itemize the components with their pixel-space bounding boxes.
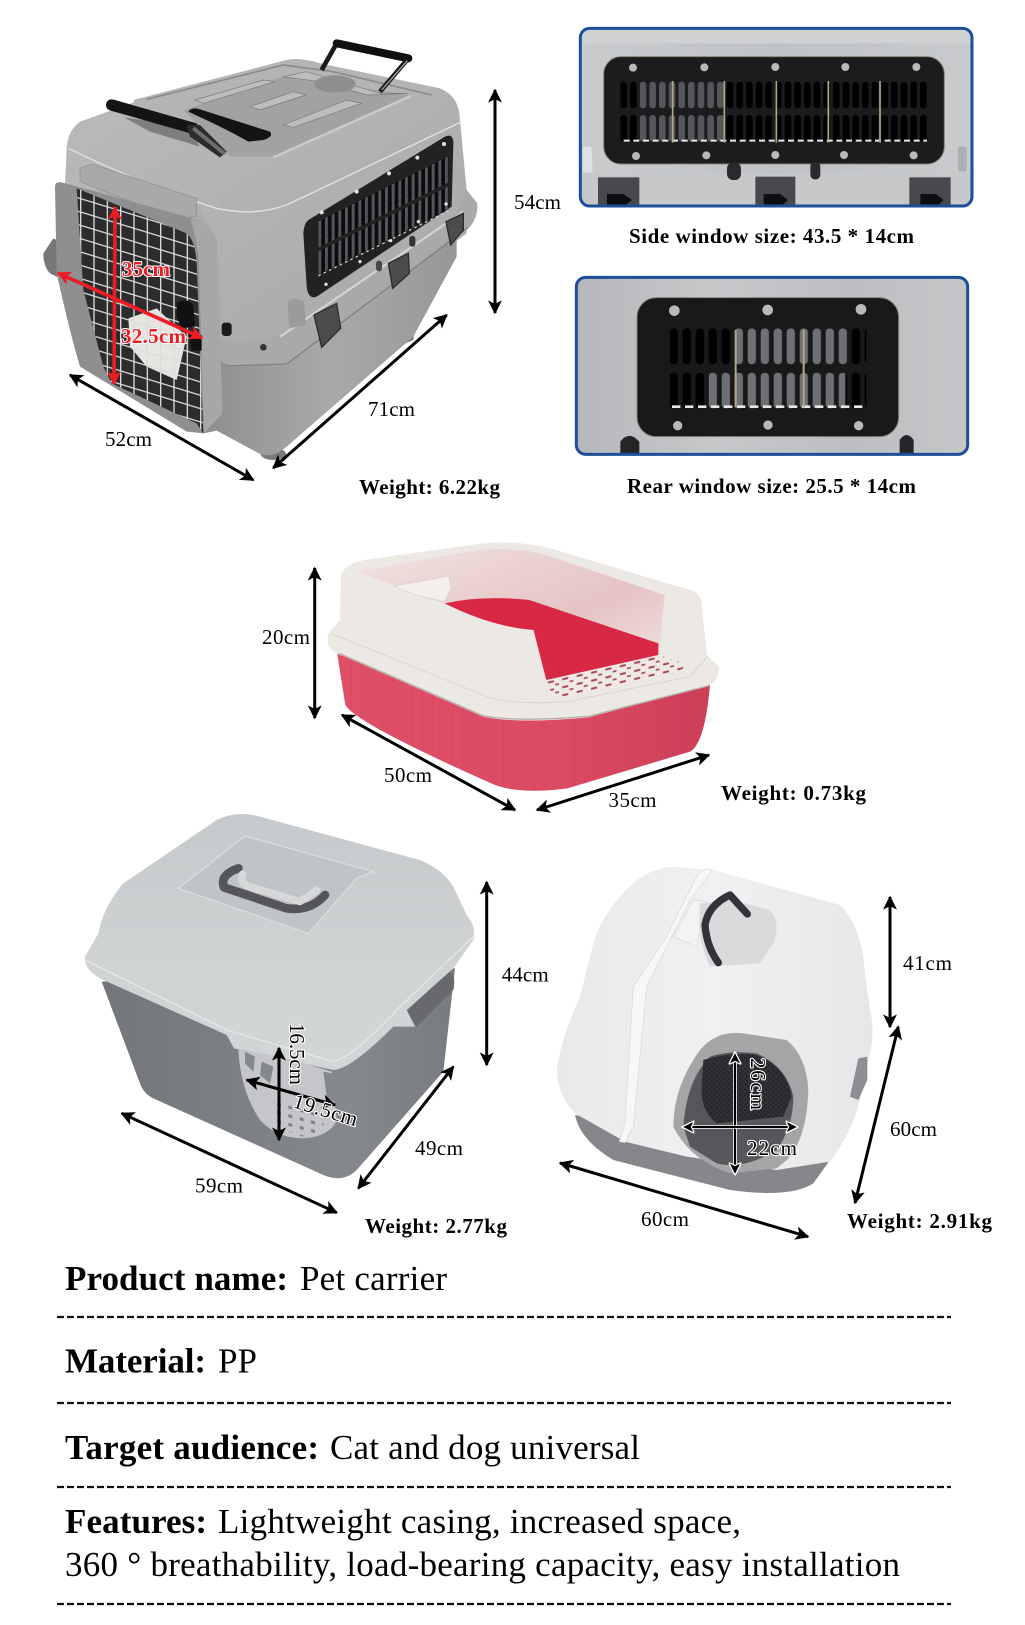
handle [705, 895, 747, 963]
band lower edge [227, 227, 468, 366]
label: depth: 49cm [415, 1136, 463, 1160]
arrow: opening width [247, 1080, 335, 1105]
red floor [445, 598, 658, 680]
panel: rear window [576, 277, 968, 498]
grey carrier illustration [85, 814, 474, 1178]
label: door height: 26cm [746, 1058, 770, 1110]
label: hooded carrier weight: Weight: 2.91kg [847, 1209, 992, 1233]
hood seam strip [619, 869, 713, 1143]
side band [207, 190, 477, 367]
hooded carrier illustration [557, 867, 872, 1193]
vent slots [620, 82, 929, 142]
label: carrier weight: Weight: 6.22kg [359, 475, 500, 499]
door right frame light [190, 218, 223, 433]
wheels [261, 328, 415, 460]
door latch [177, 300, 202, 351]
screws [629, 63, 920, 160]
screws [669, 304, 866, 430]
spec: features: Features: [65, 1502, 207, 1541]
label: grey carrier weight: Weight: 2.77kg [365, 1214, 508, 1238]
bowl behind mesh [128, 308, 187, 380]
blue border [580, 28, 972, 206]
knobs [620, 435, 914, 453]
spec: features: Lightweight casing, increased space, [218, 1502, 741, 1541]
door frame [55, 182, 223, 433]
spec: target audience [65, 1428, 640, 1467]
interior dark litter grid [702, 1054, 792, 1123]
rim line on shell [68, 122, 462, 212]
wire bars [736, 330, 804, 407]
side window photo [580, 28, 972, 207]
spec: features: 360 ° breathability, load-bearing capacity, easy installation [65, 1545, 900, 1584]
label: width: 52cm [105, 427, 152, 451]
spec: material: Material: [65, 1342, 206, 1380]
litter tray illustration [328, 542, 719, 791]
front handle [112, 105, 227, 157]
arrow: hood width [560, 1163, 808, 1237]
arrow: door width core [683, 1126, 797, 1128]
top panel [178, 836, 373, 933]
door surround [673, 1033, 808, 1173]
arrow: hood depth [855, 1027, 898, 1203]
rear window photo [576, 277, 968, 454]
carrier illustration [43, 43, 477, 460]
lid rim line [85, 937, 473, 1062]
blue border [576, 277, 968, 454]
label: height: 44cm [502, 963, 549, 987]
label: height: 54cm [514, 190, 561, 214]
lid highlight [273, 96, 411, 157]
lid plate [183, 77, 410, 157]
hood [557, 867, 872, 1170]
rim upper edge [331, 633, 707, 703]
arrow: tray height [313, 568, 316, 718]
lid [85, 814, 474, 1070]
opening perforations [273, 1100, 327, 1137]
wire bars [673, 81, 880, 143]
pink base [337, 652, 710, 791]
spec: material: PP [218, 1342, 257, 1380]
arrow: tray length [342, 715, 515, 810]
arrow: door width [58, 273, 202, 338]
arrow: carrier length [273, 315, 447, 468]
label: height: 41cm [903, 951, 952, 975]
spec: features [65, 1502, 900, 1584]
lower body [203, 233, 457, 455]
arrow: tray width [537, 755, 709, 810]
vent slots [670, 328, 866, 408]
arrow: opening height [278, 1048, 280, 1140]
label: depth: 60cm [890, 1117, 937, 1141]
product: litter tray with dimensions [262, 542, 866, 812]
arrow: carrier width [122, 1113, 337, 1213]
arrow: carrier depth [358, 1067, 453, 1188]
silhouette fill [65, 180, 467, 370]
opening side mesh [245, 1052, 336, 1103]
label: width: 59cm [195, 1174, 243, 1198]
front handle recess [188, 108, 271, 142]
band highlight [280, 212, 463, 337]
hinge tab [673, 900, 707, 947]
spec: target audience: Cat and dog universal [330, 1428, 640, 1467]
door mesh [77, 188, 203, 433]
litter scoop [394, 576, 451, 602]
lower rail [580, 173, 972, 207]
grey base [102, 968, 455, 1178]
side opening [238, 1048, 337, 1138]
caption: rear window size: Rear window size: 25.5 * 14cm [627, 474, 916, 498]
black plate [637, 298, 899, 437]
handle recess [699, 900, 777, 967]
rim lower shadow [339, 653, 709, 719]
label: door width: 32.5cm [121, 324, 186, 348]
handle [223, 868, 325, 909]
spec: target audience: Target audience: [65, 1428, 319, 1467]
side vent plate [303, 136, 453, 297]
caption: side window size: Side window size: 43.5 * 14cm [629, 224, 914, 248]
spec: product name: Product name: [65, 1259, 288, 1298]
arrow: door width [683, 1125, 797, 1129]
arrow: door height [114, 207, 115, 384]
label: tray width: 35cm [608, 788, 656, 812]
side handle [407, 972, 454, 1027]
lid ridge [147, 65, 432, 99]
white tray shell and rim [328, 542, 719, 721]
door interior [683, 1052, 793, 1165]
post and pegs [222, 236, 415, 351]
label: tray length: 50cm [384, 763, 432, 787]
arrow: carrier width [70, 375, 253, 480]
label: tray height: 20cm [262, 625, 310, 649]
latch clips [314, 213, 463, 347]
arrow: carrier height [494, 90, 496, 313]
lid cup recess [314, 75, 356, 93]
label: opening width: 19.5cm [291, 1089, 361, 1131]
arrow: door height core [734, 1053, 736, 1174]
side handle tab [850, 1057, 867, 1100]
label: length: 71cm [368, 397, 415, 421]
arrow: door height [733, 1053, 737, 1174]
label: door width: 22cm [747, 1136, 797, 1160]
label: tray weight: Weight: 0.73kg [721, 781, 866, 805]
door hood moulding [80, 164, 197, 218]
black plate [604, 57, 944, 164]
knobs [727, 162, 820, 180]
product: airline pet carrier with dimensions [43, 43, 561, 499]
lid vent recesses [195, 72, 408, 127]
door interior [77, 188, 203, 433]
label: opening height: 16.5cm [285, 1023, 309, 1085]
product: white hooded carrier with dimensions [557, 867, 992, 1237]
arrow: carrier height [485, 882, 488, 1065]
label: door height: 35cm [122, 257, 170, 281]
spec: product name [65, 1259, 447, 1298]
panel: side window [580, 28, 972, 248]
rear handle [322, 43, 408, 92]
product: grey lidded carrier with dimensions [85, 814, 549, 1238]
spec: product name: Pet carrier [300, 1259, 447, 1298]
interior back wall [356, 549, 665, 680]
upper shell [65, 59, 477, 343]
arrow: hood height [888, 897, 892, 1027]
latch clips [598, 177, 951, 207]
base ribs [337, 652, 710, 791]
label: width: 60cm [641, 1207, 689, 1231]
light posts [583, 147, 593, 173]
rear carry ear [43, 238, 63, 280]
perforated tray [546, 655, 685, 697]
grey base [575, 1115, 830, 1193]
lid top [133, 59, 433, 166]
